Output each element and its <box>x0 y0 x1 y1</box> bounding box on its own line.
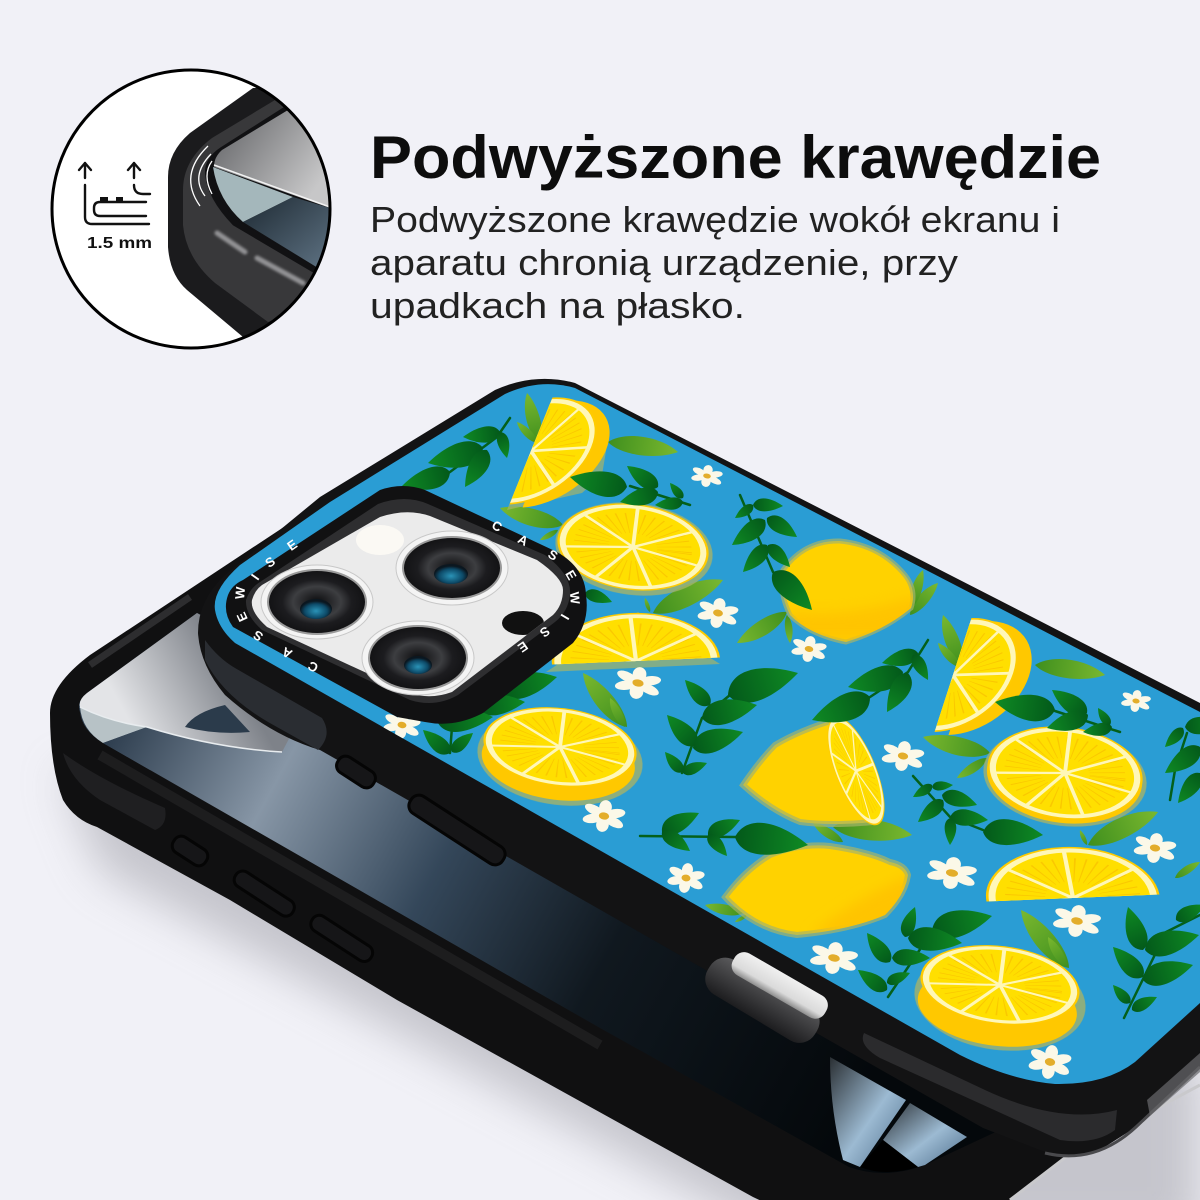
lower frame sheen <box>100 755 600 1045</box>
CASEWISE ring lettering <box>232 517 583 676</box>
camera window <box>252 512 563 696</box>
flash <box>356 525 404 555</box>
CASEWISE ring lettering: S <box>537 623 553 641</box>
detail circle: raised edge close-up <box>52 70 340 348</box>
inner bevel <box>246 499 570 703</box>
silver frame edge <box>1010 1085 1200 1200</box>
charging port <box>699 948 832 1050</box>
CASEWISE ring lettering: W <box>232 586 248 600</box>
sprig 6 <box>665 668 798 776</box>
sprig 2 <box>570 466 684 510</box>
sprig 12 <box>418 587 614 759</box>
lemon: full slice 2 <box>477 699 641 809</box>
case corner close-up <box>168 88 340 340</box>
CASEWISE ring lettering: S <box>262 553 278 571</box>
CASEWISE ring lettering: E <box>562 568 580 583</box>
sprig 1 <box>402 426 510 490</box>
CASEWISE ring lettering: S <box>545 546 561 564</box>
lemon: half slice middle <box>546 612 720 672</box>
camera ring <box>226 486 587 724</box>
sprig 4 <box>812 648 928 722</box>
sprig 7 <box>1165 716 1200 803</box>
CASEWISE ring lettering: C <box>305 658 321 676</box>
description text: Podwyższone krawędzie wokół ekranu i <box>370 199 1060 240</box>
sprig 11 <box>1113 904 1200 1012</box>
leaf stems <box>430 418 1200 1018</box>
lemon: cut lemon <box>739 721 885 827</box>
lemon: half slice right <box>986 846 1160 902</box>
CASEWISE ring lettering: E <box>233 610 251 624</box>
sprig 5 <box>995 690 1112 736</box>
lemon: full slice 1 <box>557 503 709 591</box>
impact arcs <box>191 146 212 206</box>
lemon: full slice 4 <box>913 937 1084 1055</box>
CASEWISE ring lettering: I <box>558 612 572 622</box>
lower phone screen <box>79 613 1000 1173</box>
lens top right <box>396 531 508 605</box>
CASEWISE ring lettering: E <box>284 536 300 554</box>
lemon: wedge top <box>507 397 610 510</box>
label: 1.5 mm: 1.5 mm <box>87 235 152 252</box>
lemon: whole top <box>782 541 920 642</box>
icon: raised lip diagram <box>79 163 150 224</box>
lemon halos <box>472 494 1152 1060</box>
lemon: whole bottom <box>725 845 912 935</box>
drop shadow under phones <box>60 770 1200 1200</box>
CASEWISE ring lettering: A <box>279 644 295 662</box>
lower phone with open case frame <box>50 482 1200 1200</box>
sprig 8 <box>911 780 1044 847</box>
lens left <box>261 565 373 639</box>
frame grip pads <box>205 640 327 750</box>
blossoms <box>380 462 1180 1083</box>
CASEWISE ring lettering: C <box>489 517 505 535</box>
lower phone side buttons <box>169 833 376 965</box>
upper phone case <box>198 370 1200 1156</box>
sprig 9 <box>662 812 808 856</box>
lens bottom <box>362 621 474 695</box>
lemon artwork panel <box>200 370 1200 1100</box>
description text <box>370 199 1060 326</box>
microphone hole <box>502 611 544 635</box>
lemon: wedge right <box>934 618 1032 735</box>
case frame <box>198 379 1200 1155</box>
CASEWISE ring lettering: A <box>515 531 531 549</box>
headline: Podwyższone krawędzie <box>370 124 1101 191</box>
lower frame grip pad <box>63 753 166 830</box>
sprig 10 <box>858 907 992 992</box>
CASEWISE ring lettering: I <box>248 571 262 583</box>
light green leaves <box>498 391 1200 975</box>
side buttons <box>333 753 509 868</box>
lemon: full slice 3 <box>986 726 1143 824</box>
CASEWISE ring lettering: E <box>515 638 531 656</box>
CASEWISE ring lettering: W <box>567 591 583 605</box>
sprig 3 <box>732 498 812 610</box>
camera module <box>226 486 587 724</box>
description text: aparatu chronią urządzenie, przy <box>370 242 958 283</box>
description text: upadkach na płasko. <box>370 285 745 326</box>
CASEWISE ring lettering: S <box>250 627 266 645</box>
